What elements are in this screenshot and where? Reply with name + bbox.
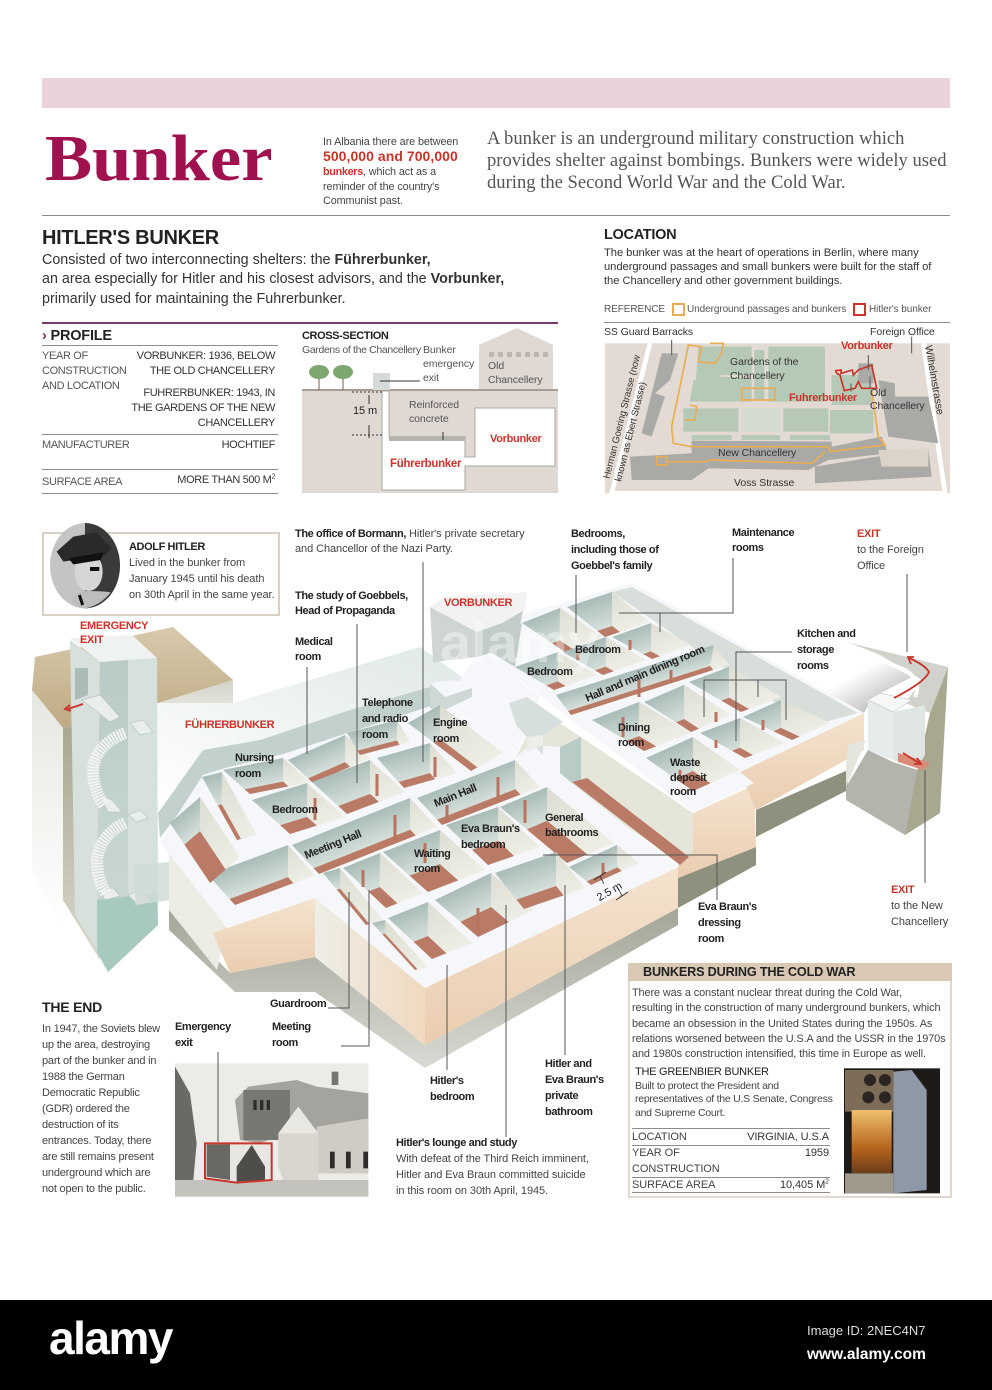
label: emergency exit: EMERGENCY xyxy=(80,620,148,632)
label: goebbels: The study of Goebbels, xyxy=(295,590,408,602)
map: gardens: Gardens of the xyxy=(730,356,798,368)
vorbunker top slab xyxy=(445,583,864,812)
label: gardens: Gardens of the Chancellery xyxy=(302,344,421,356)
label: nursing xyxy=(235,752,274,780)
label: reinforced concrete: concrete xyxy=(409,413,449,425)
footer url: www.alamy.com xyxy=(807,1346,926,1363)
label: bedroom upper: Bedroom xyxy=(575,644,620,656)
map: foreign office: Foreign Office xyxy=(870,326,935,338)
führerbunker top slab xyxy=(158,647,678,988)
label: exit new chancellery xyxy=(891,884,948,928)
map: herman goering strasse: known as Ebert Strasse) xyxy=(613,381,649,483)
label: dining room: Dining xyxy=(618,722,650,734)
heading bar: BUNKERS DURING THE COLD WAR xyxy=(643,965,855,979)
label: nursing: room xyxy=(235,768,261,780)
section: the end: up the area, destroying xyxy=(42,1039,150,1051)
label: eva braun's bedroom: bedroom xyxy=(461,839,505,851)
legend orange xyxy=(672,303,685,316)
albania callout: reminder of the country's xyxy=(323,181,439,193)
label: engine: Engine xyxy=(433,717,467,729)
section: location xyxy=(604,227,932,287)
footer image id: Image ID: 2NEC4N7 xyxy=(807,1323,926,1338)
section: the end: destruction of its xyxy=(42,1119,118,1131)
intro text: provides shelter against bombings. Bunkers were widely used xyxy=(487,150,947,171)
label: old chancellery: Chancellery xyxy=(488,374,543,386)
greenbier text: representatives of the U.S Senate, Congress xyxy=(635,1093,833,1105)
label: lounge and study: Hitler and Eva Braun committed suicide xyxy=(396,1169,586,1181)
table: location xyxy=(632,1129,830,1145)
label: maintenance: Maintenance xyxy=(732,527,794,539)
label: reinforced concrete xyxy=(409,399,459,425)
cold war text: resulting in the construction of many underground bunkers, which xyxy=(632,1002,940,1014)
label: kitchen xyxy=(797,628,856,672)
map: ss guard barracks: SS Guard Barracks xyxy=(604,326,693,338)
leader: emergency exit xyxy=(217,1052,219,1142)
label: führerbunker: FÜHRERBUNKER xyxy=(185,719,274,731)
section: hitler's bunker: primarily used for maintaining the Fuhrerbunker. xyxy=(42,290,346,306)
label: bedrooms: Goebbel's family xyxy=(571,560,652,572)
header divider xyxy=(42,215,950,216)
building exterior walls xyxy=(169,713,864,1068)
hitler text xyxy=(129,541,274,601)
section: the end: 1988 the German xyxy=(42,1071,125,1083)
label: emergency exit: emergency xyxy=(423,358,474,370)
label: hitler's bedroom xyxy=(430,1075,474,1103)
label: general bathrooms xyxy=(545,812,598,839)
label: emergency exit photo xyxy=(175,1021,231,1049)
section: hitler's bunker: an area especially for Hitler and his closest advisors, and the Vorbunker, xyxy=(42,271,504,287)
profile: year values: THE GARDENS OF THE NEW xyxy=(131,402,275,414)
emergency exit tower xyxy=(32,627,233,972)
label: waiting room xyxy=(414,848,451,875)
greenbier text: Built to protect the President and xyxy=(635,1080,779,1092)
section: the end: are still remains present xyxy=(42,1151,154,1163)
cold war text: and 1980s construction intensified, this time in Europe as well. xyxy=(632,1048,926,1060)
label: kitchen: storage xyxy=(797,644,834,656)
section: the end: In 1947, the Soviets blew xyxy=(42,1023,160,1035)
label: 15 m: 15 m xyxy=(353,405,377,417)
map: voss strasse: Voss Strasse xyxy=(734,477,794,489)
albania callout: bunkers, which act as a xyxy=(323,166,436,178)
label: private bathroom: Hitler and xyxy=(545,1058,592,1070)
label: exit foreign office: Office xyxy=(857,560,885,572)
top callout labels: The office of Bormann, Hitler's private secretary xyxy=(295,528,525,540)
ruins photograph xyxy=(175,1063,368,1197)
profile: year and location xyxy=(42,350,126,392)
label: exit new chancellery: Chancellery xyxy=(891,916,948,928)
map: herman goering strasse: Herman Goering Strasse (now xyxy=(602,354,643,480)
label: hitler's bedroom: bedroom xyxy=(430,1091,474,1103)
label: dressing room xyxy=(698,901,757,945)
map: old chancellery: Old xyxy=(870,387,886,399)
label: exit foreign office xyxy=(857,528,924,572)
location map xyxy=(605,337,950,493)
map: new chancellery: New Chancellery xyxy=(718,447,796,459)
label: lounge and study xyxy=(396,1135,589,1199)
section: the end: entrances. Today, there xyxy=(42,1135,151,1147)
label: hall and main dining room: Hall and main dining room xyxy=(584,643,706,705)
label: medical: room xyxy=(295,651,321,663)
trench between bunkers xyxy=(509,697,693,867)
label: guardroom: Guardroom xyxy=(270,998,326,1010)
heading: profile: › PROFILE xyxy=(42,328,112,344)
map: fuhrerbunker: Fuhrerbunker xyxy=(789,392,857,404)
profile: surface area: SURFACE AREA xyxy=(42,476,122,488)
label: nursing: Nursing xyxy=(235,752,274,764)
label: exit foreign office: to the Foreign xyxy=(857,544,924,556)
hitler text: on 30th April in the same year. xyxy=(129,589,274,601)
label: lounge and study: in this room on 30th April, 1945. xyxy=(396,1185,548,1197)
vorbunker entrance block xyxy=(430,592,527,712)
label: engine: room xyxy=(433,733,459,745)
label: vorbunker: VORBUNKER xyxy=(444,597,512,609)
albania callout: In Albania there are between xyxy=(323,136,458,148)
top callout labels: and Chancellor of the Nazi Party. xyxy=(295,543,453,555)
profile: year values: FUHRERBUNKER: 1943, IN xyxy=(143,387,275,399)
label: private bathroom: bathroom xyxy=(545,1106,593,1118)
map: gardens: Chancellery xyxy=(730,370,785,382)
label: waste deposit room xyxy=(670,757,707,798)
profile: year and location: CONSTRUCTION xyxy=(42,365,126,377)
label: maintenance: rooms xyxy=(732,542,764,554)
map: gardens xyxy=(730,356,798,382)
footer logo: alamy xyxy=(49,1312,172,1364)
label: waste deposit room: Waste xyxy=(670,757,700,769)
section: the end: part of the bunker and in xyxy=(42,1055,156,1067)
map: vorbunker: Vorbunker xyxy=(841,340,892,352)
label: private bathroom: Eva Braun's xyxy=(545,1074,604,1086)
label: engine xyxy=(433,717,468,745)
table: surface: SURFACE AREA xyxy=(632,1179,715,1191)
top callout labels xyxy=(295,528,525,555)
watermark: alamy xyxy=(440,611,599,674)
vorbunker rooms xyxy=(515,587,858,791)
label: meeting room: room xyxy=(272,1037,298,1049)
label: dressing room: dressing xyxy=(698,917,741,929)
label: emergency exit xyxy=(423,344,474,384)
section: hitler's bunker xyxy=(42,227,504,306)
label: emergency exit: Bunker xyxy=(423,344,456,356)
label: meeting room: Meeting xyxy=(272,1021,311,1033)
greenbier text: and Supreme Court. xyxy=(635,1106,725,1118)
arrows: exit routes xyxy=(65,657,929,764)
profile: hochtief: HOCHTIEF xyxy=(222,439,275,451)
table: year: YEAR OF xyxy=(632,1147,680,1159)
table: location: VIRGINIA, U.S.A xyxy=(747,1131,829,1143)
table: location: LOCATION xyxy=(632,1131,687,1143)
map legend xyxy=(604,302,950,323)
table: surface xyxy=(632,1177,830,1193)
section: the end: THE END xyxy=(42,999,102,1015)
label: lounge and study: With defeat of the Third Reich imminent, xyxy=(396,1153,589,1165)
intro text xyxy=(487,128,947,193)
greenbier text xyxy=(635,1066,833,1120)
albania callout xyxy=(323,136,458,207)
label: emergency exit xyxy=(80,620,148,646)
label: dressing room: Eva Braun's xyxy=(698,901,757,913)
label: 2.5 m: 2.5 m xyxy=(595,880,624,904)
footer xyxy=(0,1300,992,1390)
cross-section labels xyxy=(302,330,543,470)
greenbier text: THE GREENBIER BUNKER xyxy=(635,1066,769,1078)
label: dining room xyxy=(618,722,650,749)
section: the end: Democratic Republic xyxy=(42,1087,140,1099)
map: wilhelmstrasse: Wilhelmstrasse xyxy=(922,344,946,416)
label: maintenance xyxy=(732,527,794,554)
section: hitler's bunker: HITLER'S BUNKER xyxy=(42,227,219,249)
table: year: 1959 xyxy=(805,1147,829,1159)
section: the end xyxy=(42,999,160,1195)
section: location: LOCATION xyxy=(604,227,676,243)
profile: year values: THE OLD CHANCELLERY xyxy=(150,365,275,377)
section: the end: underground which are xyxy=(42,1167,150,1179)
profile: year and location: AND LOCATION xyxy=(42,380,120,392)
panel: adolf hitler xyxy=(42,532,280,616)
label: bedrooms xyxy=(571,528,659,572)
panel: bunkers during the cold war xyxy=(628,963,952,1198)
label: führerbunker: Führerbunker xyxy=(390,458,461,470)
panel: profile xyxy=(42,322,558,494)
label: telephone: Telephone xyxy=(362,697,413,709)
label: kitchen: rooms xyxy=(797,660,829,672)
map labels xyxy=(602,326,946,489)
label: dining room: room xyxy=(618,737,644,749)
label: cross-section heading: CROSS-SECTION xyxy=(302,330,388,342)
dimension marks: 2.5 m xyxy=(594,872,628,900)
leader lines xyxy=(307,558,925,1137)
legend orange text: Underground passages and bunkers xyxy=(687,304,846,315)
label: lounge and study: Hitler's lounge and study xyxy=(396,1137,517,1149)
cold war text xyxy=(632,986,945,1062)
label: waiting room: Waiting xyxy=(414,848,451,860)
profile: year values xyxy=(131,350,276,429)
label: old chancellery xyxy=(488,360,543,386)
label: emergency exit: EXIT xyxy=(80,634,103,646)
hitler text: Lived in the bunker from xyxy=(129,557,245,569)
label: eva braun's bedroom: Eva Braun's xyxy=(461,823,520,835)
label: bedrooms: including those of xyxy=(571,544,659,556)
legend red xyxy=(853,303,866,316)
label: telephone: and radio xyxy=(362,713,408,725)
legend label: REFERENCE xyxy=(604,304,665,315)
label: telephone xyxy=(362,697,413,741)
albania callout: 500,000 and 700,000 xyxy=(323,148,458,164)
cold war text: There was a constant nuclear threat during the Cold War, xyxy=(632,987,902,999)
room doors xyxy=(315,640,763,933)
label: goebbels xyxy=(295,590,408,617)
table: year: CONSTRUCTION xyxy=(632,1163,720,1175)
intro text: during the Second World War and the Cold War. xyxy=(487,172,846,193)
section: location: the Chancellery and other government buildings. xyxy=(604,275,842,287)
label: waiting room: room xyxy=(414,863,440,875)
table: year xyxy=(632,1145,830,1177)
map: old chancellery: Chancellery xyxy=(870,400,925,412)
title: Bunker xyxy=(45,122,273,195)
label: main hall: Main Hall xyxy=(432,782,478,810)
label: exit foreign office: EXIT xyxy=(857,528,880,540)
section: location: underground passages and small bunkers were built for the staff of xyxy=(604,261,931,273)
intro text: A bunker is an underground military construction which xyxy=(487,128,904,149)
map: old chancellery xyxy=(870,387,925,412)
label: bedrooms: Bedrooms, xyxy=(571,528,625,540)
profile: year and location: YEAR OF xyxy=(42,350,88,362)
label: bedroom lower: Bedroom xyxy=(527,666,572,678)
legend red text: Hitler's bunker xyxy=(869,304,931,315)
label: private bathroom: private xyxy=(545,1090,578,1102)
label: reinforced concrete: Reinforced xyxy=(409,399,459,411)
label: eva braun's bedroom xyxy=(461,823,520,851)
label: general bathrooms: General xyxy=(545,812,583,824)
top pink band xyxy=(42,78,950,108)
hitler text: January 1945 until his death xyxy=(129,573,264,585)
profile: surface value: MORE THAN 500 M2 xyxy=(177,473,275,486)
führerbunker rooms xyxy=(170,705,639,970)
profile: year values: VORBUNKER: 1936, BELOW xyxy=(137,350,275,362)
label: exit new chancellery: to the New xyxy=(891,900,943,912)
cross-section drawing xyxy=(302,328,558,493)
label: medical xyxy=(295,636,333,663)
label: hitler's bedroom: Hitler's xyxy=(430,1075,464,1087)
profile: manufacturer: MANUFACTURER xyxy=(42,439,129,451)
label: old chancellery: Old xyxy=(488,360,504,372)
cold war text: relations worsened between the U.S.A and the USSR in the 1970s xyxy=(632,1033,945,1045)
heading bar xyxy=(628,963,952,981)
label: emergency exit photo: exit xyxy=(175,1037,192,1049)
hitler text: ADOLF HITLER xyxy=(129,541,205,553)
label: vorbunker: Vorbunker xyxy=(490,433,542,445)
albania callout: Communist past. xyxy=(323,195,403,207)
table: surface: 10,405 M2 xyxy=(780,1178,829,1191)
section: the end: not open to the public. xyxy=(42,1183,146,1195)
section: hitler's bunker: Consisted of two interconnecting shelters: the Führerbunker, xyxy=(42,252,431,268)
label: waste deposit room: deposit xyxy=(670,772,706,784)
label: telephone: room xyxy=(362,729,388,741)
label: meeting hall: Meeting Hall xyxy=(303,828,363,862)
section: the end: (GDR) ordered the xyxy=(42,1103,130,1115)
label: dressing room: room xyxy=(698,933,724,945)
profile: year values: CHANCELLERY xyxy=(198,417,275,429)
label: exit new chancellery: EXIT xyxy=(891,884,914,896)
cold war text: became an obsession in the United States during the 1950s. As xyxy=(632,1018,932,1030)
exit section xyxy=(770,635,948,835)
label: emergency exit photo: Emergency xyxy=(175,1021,231,1033)
label: meeting room xyxy=(272,1021,311,1049)
label: bedroom: Bedroom xyxy=(272,804,317,816)
label: waste deposit room: room xyxy=(670,786,696,798)
label: medical: Medical xyxy=(295,636,333,648)
label: private bathroom xyxy=(545,1056,604,1120)
label: goebbels: Head of Propaganda xyxy=(295,605,395,617)
label: general bathrooms: bathrooms xyxy=(545,827,598,839)
label: emergency exit: exit xyxy=(423,372,439,384)
greenbier bunker photograph xyxy=(844,1068,940,1193)
section: location: The bunker was at the heart of operations in Berlin, where many xyxy=(604,247,919,259)
label: kitchen: Kitchen and xyxy=(797,628,856,640)
